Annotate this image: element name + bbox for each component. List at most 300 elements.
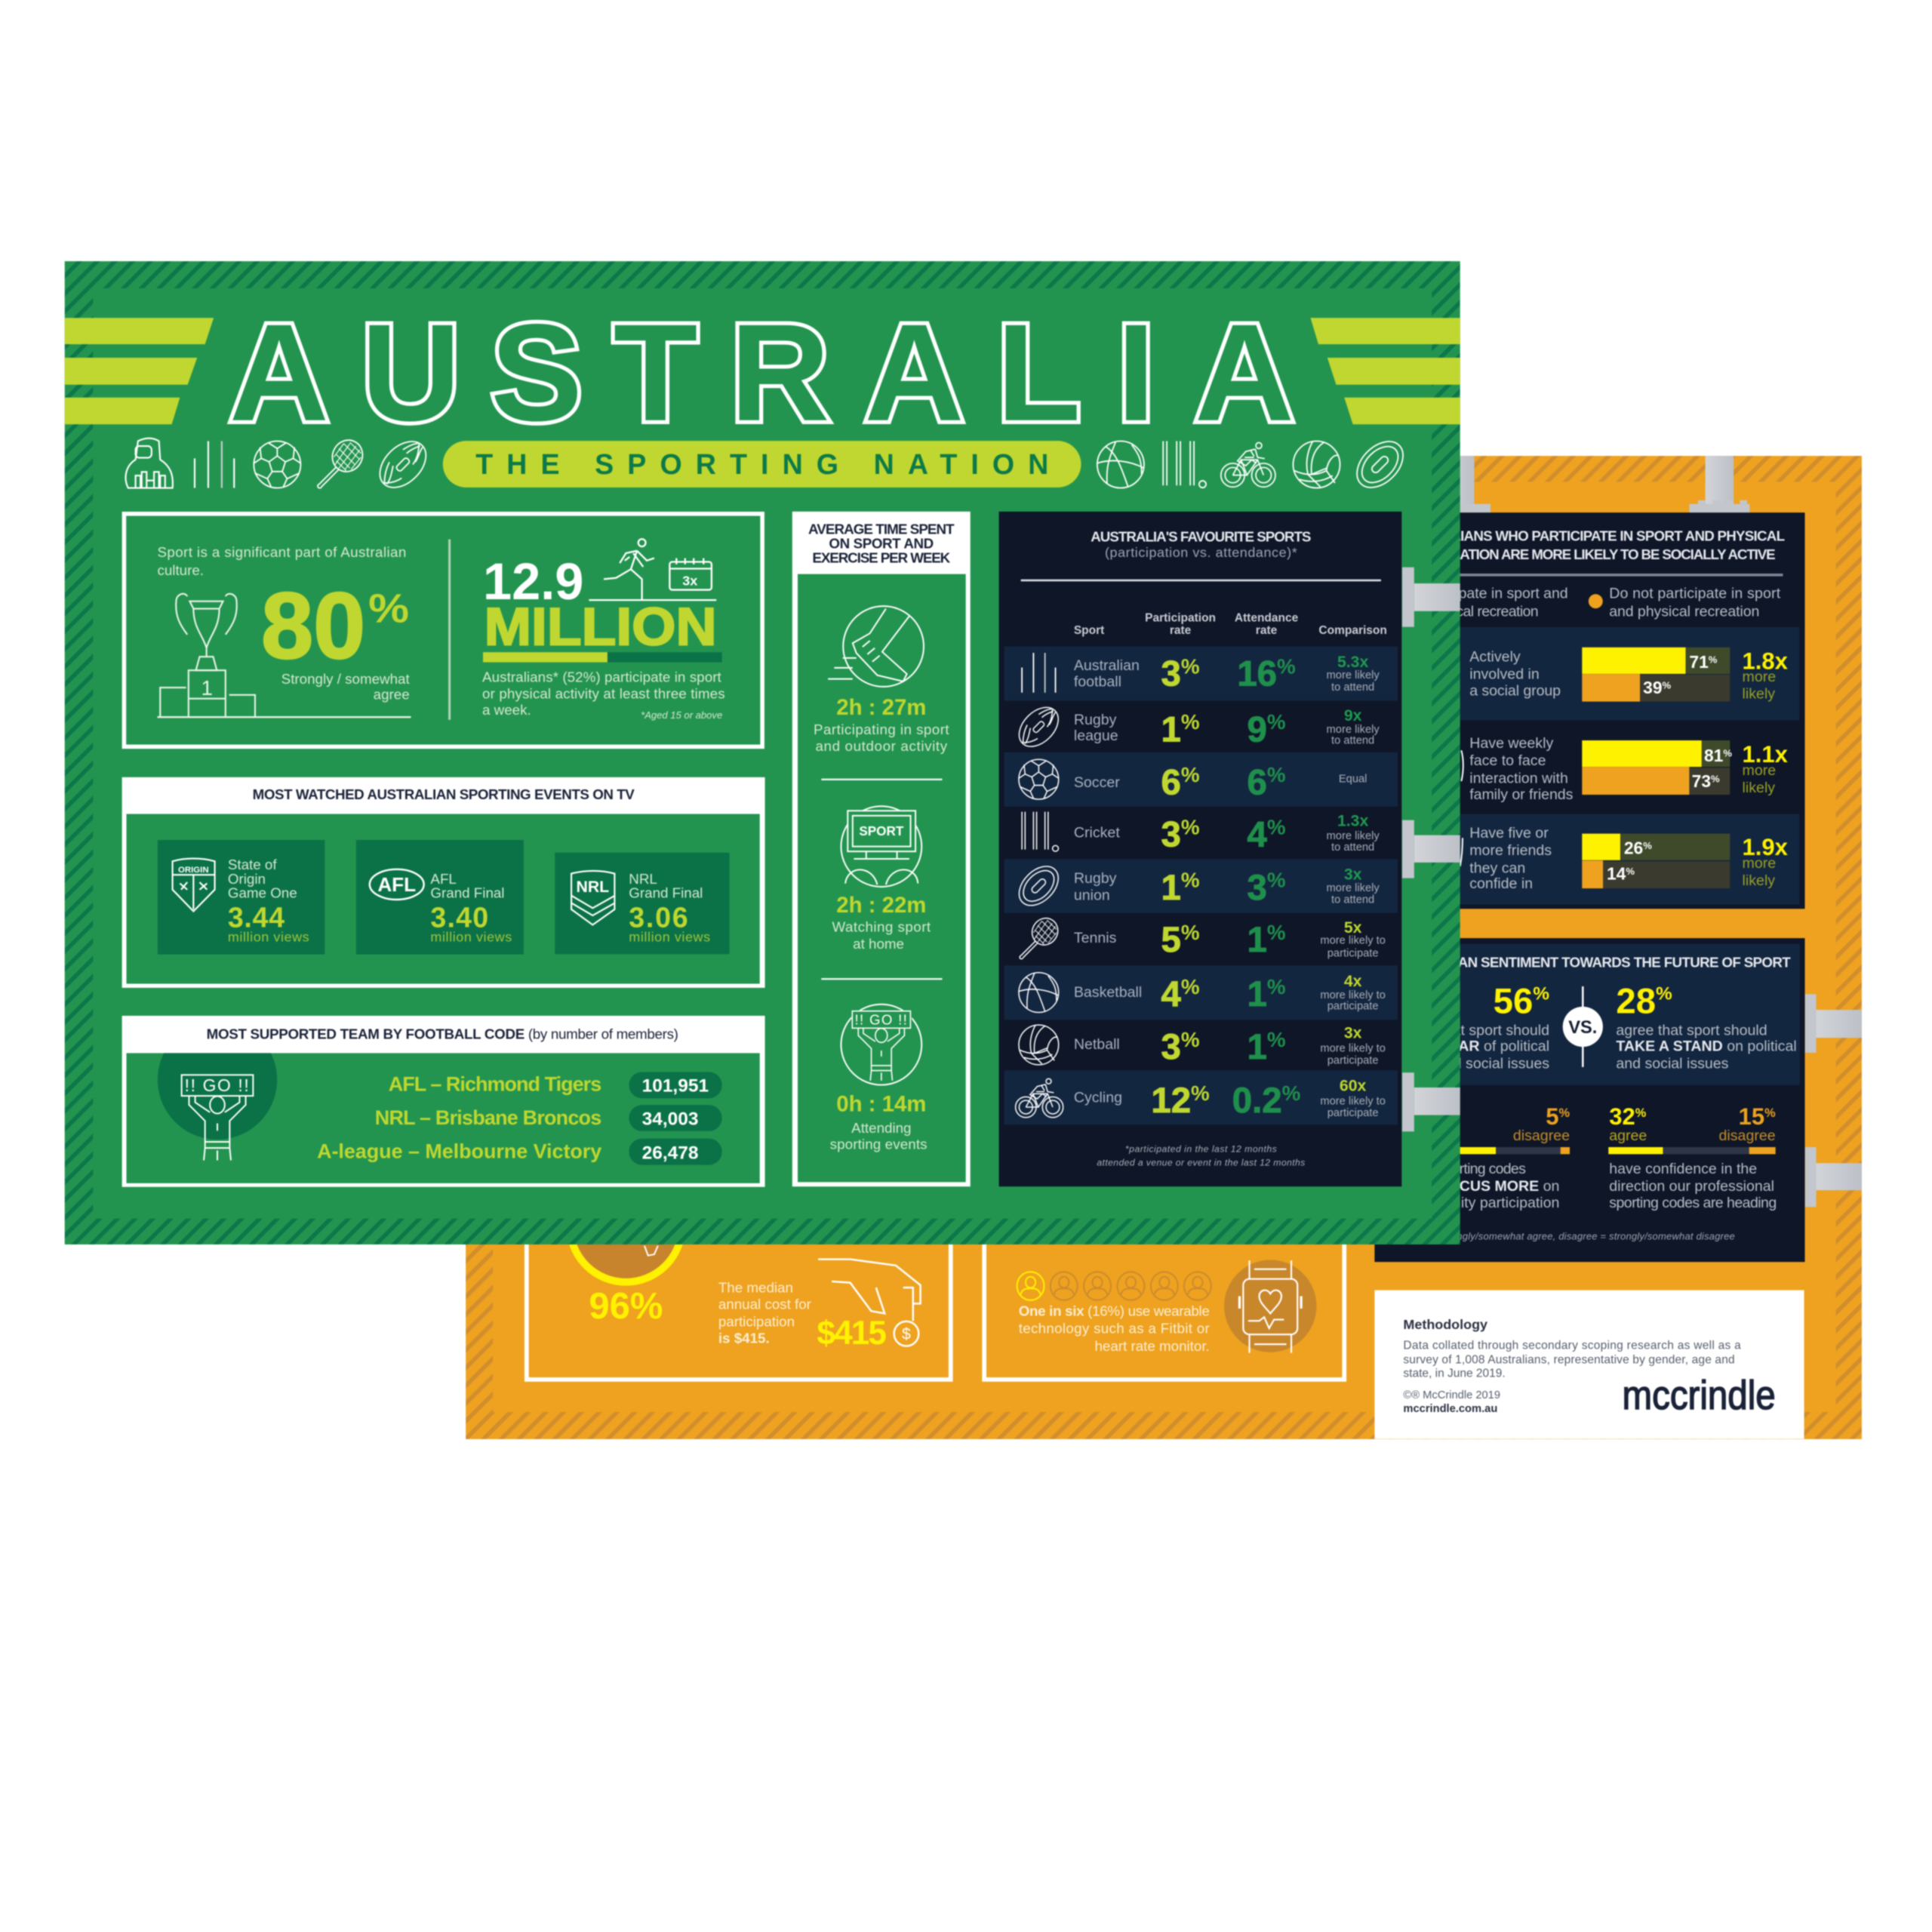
row: Cricket: 1.3x	[1337, 813, 1368, 830]
panel: favourite sports table	[999, 512, 1401, 1186]
table header: Participation	[1145, 612, 1216, 625]
item: attending: Attending	[851, 1120, 911, 1136]
stat: focus more: Sporting codes	[1435, 1161, 1526, 1177]
stat: 56 percent steer clear: agree that sport should	[1398, 1022, 1549, 1038]
member counts	[629, 1072, 722, 1165]
row: Rugby league: 9x	[1344, 707, 1362, 724]
icon: hand dropping coin: $	[902, 1326, 911, 1343]
panel: sentiment towards future of sport	[1374, 938, 1805, 1262]
title: AUSTRALIA: A	[1195, 295, 1294, 450]
row: Cricket: %	[1181, 815, 1200, 838]
panel: most supported team	[122, 1016, 765, 1187]
icon: TV on circle: SPORT	[859, 823, 904, 838]
row: Tennis: 1	[1247, 920, 1267, 960]
stat: confidence in direction: disagree	[1719, 1128, 1776, 1144]
stat: 56 percent steer clear: STEER CLEAR of political	[1375, 1038, 1549, 1055]
row: Basketball: more likely to	[1320, 989, 1386, 1001]
bars: socially active group: more	[1743, 669, 1776, 685]
text: wearables: heart rate monitor.	[1094, 1338, 1210, 1354]
card: AFL Grand Final: 3.40	[430, 902, 488, 934]
row: Basketball: %	[1267, 975, 1286, 998]
row: Basketball: %	[1181, 975, 1200, 998]
heading: favourite sports: (participation vs. attendance)*	[1105, 545, 1297, 560]
row: Cycling: participate	[1327, 1107, 1379, 1119]
stat: 28 percent take a stand: %	[1656, 984, 1672, 1004]
panel: methodology: survey of 1,008 Australians, representative by gender, age and	[1403, 1354, 1735, 1367]
panel: average time	[792, 512, 971, 1186]
panel: orange background sheet	[466, 456, 1862, 1439]
panel: wearable technology	[984, 1220, 1344, 1380]
icon: basketball	[1097, 441, 1144, 488]
heading: average time: EXERCISE PER WEEK	[812, 549, 951, 565]
panel: methodology	[1374, 1291, 1804, 1439]
icon: runner and calendar: 3x	[682, 574, 697, 589]
bars: socially active group: %	[1709, 654, 1718, 665]
row: Cycling	[1004, 1070, 1398, 1124]
bars: socially active group: 39	[1643, 678, 1663, 697]
icon: netball	[1293, 441, 1340, 488]
panel: most watched events	[122, 777, 765, 988]
legend	[1418, 586, 1781, 620]
row: Tennis: 5	[1161, 920, 1181, 960]
row: Netball: %	[1267, 1028, 1286, 1051]
legend: Participate in sport and	[1418, 586, 1568, 602]
row: Rugby league: %	[1267, 710, 1286, 734]
donut: 96 percent: 96%	[589, 1286, 663, 1327]
icon: rugby ball	[371, 432, 435, 497]
team rows: AFL – Richmond Tigers	[389, 1073, 601, 1096]
heading: most supported: MOST SUPPORTED TEAM BY FOOTBALL CODE (by number of members)	[207, 1026, 678, 1041]
row: Rugby league: %	[1181, 710, 1200, 734]
panel: green main sheet	[65, 261, 1460, 1244]
bars: weekly interaction: 1.1x	[1743, 741, 1789, 768]
text: strongly agree: agree	[374, 687, 410, 703]
text: participation: Australians* (52%) participate in sport	[482, 669, 722, 685]
bars: five or more friends: 26	[1624, 838, 1643, 857]
footnote: table	[1097, 1144, 1305, 1168]
title: AUSTRALIA: R	[730, 295, 829, 450]
row: Rugby league: 9	[1247, 710, 1267, 750]
bars: five or more friends: they can	[1469, 860, 1525, 877]
decorative lime stripes right	[1310, 318, 1460, 424]
row: Tennis: 5x	[1344, 919, 1362, 937]
stat: focus more: %	[1558, 1106, 1570, 1120]
member counts: 101,951	[642, 1076, 709, 1097]
card: NRL Grand Final: NRL	[629, 871, 657, 887]
bars: socially active group: 1.8x	[1743, 648, 1789, 675]
bars: five or more friends: likely	[1743, 872, 1775, 889]
bars: weekly interaction: Have weekly	[1469, 735, 1553, 752]
item: attending	[830, 1004, 928, 1152]
row: Basketball: 1	[1247, 974, 1267, 1014]
icon: hand dropping coin	[818, 1260, 921, 1346]
card: State of Origin	[158, 840, 325, 955]
panel: methodology: Data collated through secondary scoping research as well as a	[1403, 1340, 1741, 1352]
title: AUSTRALIA: L	[996, 295, 1081, 450]
icon: NRL shield	[571, 871, 614, 924]
icon: fan with go banner	[158, 1053, 277, 1160]
stat: focus more: 5	[1546, 1103, 1558, 1130]
icon: runner and calendar	[589, 539, 716, 600]
text: wearables: technology such as a Fitbit or	[1019, 1321, 1210, 1337]
row: Cricket: Cricket	[1074, 824, 1120, 841]
text: wearables: One in six (16%) use wearable	[1019, 1303, 1210, 1319]
row: Cricket: more likely	[1327, 830, 1380, 842]
stat: confidence in direction: have confidence in the	[1609, 1161, 1757, 1177]
row: Cycling: more likely to	[1320, 1096, 1386, 1108]
row: Rugby union: union	[1074, 888, 1110, 904]
row: Rugby union: to attend	[1331, 894, 1374, 906]
heading: average time: ON SPORT AND	[829, 536, 934, 552]
icon row left	[126, 432, 435, 497]
item: attending: 0h : 14m	[836, 1092, 926, 1117]
text: participation	[482, 669, 725, 721]
bars: weekly interaction: family or friends	[1469, 786, 1574, 803]
bars: weekly interaction: %	[1711, 774, 1720, 785]
heading: most watched: MOST WATCHED AUSTRALIAN SPORTING EVENTS ON TV	[253, 786, 635, 802]
item: participating: 2h : 27m	[836, 695, 926, 720]
title: AUSTRALIA: A	[229, 295, 329, 450]
footnote: table: *participated in the last 12 months	[1125, 1144, 1277, 1155]
stat: confidence in direction: %	[1764, 1106, 1776, 1120]
bars: weekly interaction: 73	[1692, 771, 1711, 791]
icon: trophy on podium: 1	[202, 676, 213, 700]
row: Rugby league: 1	[1161, 710, 1181, 750]
icon: soccer ball	[254, 441, 300, 488]
item: watching: 2h : 22m	[836, 893, 926, 918]
row: Cycling: 60x	[1340, 1077, 1367, 1094]
stat: 12.9 million	[483, 552, 722, 663]
row: Soccer: 6	[1247, 763, 1267, 803]
heading: sentiment: AUSTRALIAN SENTIMENT TOWARDS THE FUTURE OF SPORT	[1390, 955, 1791, 971]
icon: goal posts	[195, 441, 234, 488]
row: Soccer	[1004, 752, 1398, 807]
row: Tennis: more likely to	[1320, 935, 1386, 947]
member counts: 26,478	[642, 1143, 698, 1164]
item: watching	[832, 806, 931, 952]
table header: Attendance	[1235, 612, 1299, 625]
logo: mccrindle: mccrindle	[1623, 1373, 1776, 1418]
row: Tennis: %	[1267, 921, 1286, 944]
row: Rugby union: 3x	[1344, 866, 1362, 884]
text: strongly agree	[281, 671, 410, 703]
bars: five or more friends: 14	[1607, 864, 1626, 884]
row: Rugby league: Rugby	[1074, 712, 1117, 728]
stat: confidence in direction: direction our professional	[1609, 1178, 1774, 1195]
stat: 56 percent steer clear: 56	[1494, 982, 1533, 1022]
item: watching: at home	[853, 936, 904, 952]
text: median cost: annual cost for	[718, 1297, 811, 1312]
icon: AFL logo	[370, 869, 424, 900]
row: Basketball: 4x	[1344, 973, 1362, 990]
panel: methodology: mccrindle.com.au	[1403, 1403, 1497, 1415]
subtitle pill	[443, 441, 1081, 488]
bars: weekly interaction	[1469, 735, 1789, 803]
bars: weekly interaction: %	[1723, 747, 1732, 758]
item: attending: sporting events	[830, 1136, 928, 1152]
stat: 12.9 million: MILLION	[485, 596, 717, 656]
title: AUSTRALIA: U	[361, 295, 461, 450]
table header	[1074, 612, 1387, 637]
bars: weekly interaction: face to face	[1469, 752, 1546, 769]
row: Rugby union: 3	[1247, 868, 1267, 908]
text: participation: *Aged 15 or above	[641, 709, 722, 721]
bars: socially active group: involved in	[1469, 666, 1540, 683]
row: Cycling: %	[1191, 1081, 1210, 1105]
item: participating: Participating in sport	[814, 721, 949, 737]
row: Soccer: %	[1267, 763, 1286, 786]
item: participating: and outdoor activity	[815, 738, 948, 754]
icons: one in six people	[1017, 1272, 1211, 1300]
row: Tennis: Tennis	[1074, 930, 1117, 946]
team rows: NRL – Brisbane Broncos	[375, 1106, 601, 1129]
team rows	[317, 1073, 601, 1163]
row: Netball: participate	[1327, 1054, 1379, 1066]
row: Cricket: 3	[1161, 815, 1181, 855]
row: Rugby union: Rugby	[1074, 870, 1117, 887]
row: Australian football: %	[1277, 654, 1296, 678]
text: participation: or physical activity at least three times	[482, 686, 725, 702]
title: AUSTRALIA: A	[864, 295, 964, 450]
card: NRL Grand Final: million views	[629, 930, 710, 945]
row: Rugby league	[1012, 700, 1380, 754]
row: Cycling: Cycling	[1074, 1089, 1122, 1106]
stat: focus more	[1380, 1103, 1570, 1211]
stat: 28 percent take a stand: agree that sport should	[1616, 1022, 1767, 1038]
bars: weekly interaction: 81	[1704, 746, 1723, 765]
row: Rugby union: %	[1267, 869, 1286, 892]
row: Netball: Netball	[1074, 1036, 1120, 1053]
icon row right	[1097, 432, 1412, 497]
row: Soccer: %	[1181, 763, 1200, 786]
row: Cricket: %	[1267, 815, 1286, 838]
bars: socially active group: 71	[1689, 652, 1709, 672]
row: Netball: 3	[1161, 1027, 1181, 1067]
bars: socially active group: a social group	[1469, 683, 1561, 700]
bars: five or more friends: more	[1743, 855, 1776, 872]
text: median cost: The median	[718, 1280, 793, 1296]
row: Rugby union: 1	[1161, 868, 1181, 908]
footnote: *agree = strongly/somewhat agree, disagree = strongly/somewhat disagree	[1398, 1230, 1735, 1241]
table header: rate	[1170, 624, 1192, 637]
heading: favourite sports: AUSTRALIA'S FAVOURITE SPORTS	[1091, 529, 1311, 545]
row: Basketball: participate	[1327, 1001, 1379, 1013]
card: AFL Grand Final: Grand Final	[430, 885, 504, 901]
stat: confidence in direction: agree	[1609, 1128, 1647, 1144]
icon: cyclist	[1221, 443, 1275, 487]
row: Cricket: 4	[1247, 815, 1267, 855]
row: Netball: %	[1181, 1028, 1200, 1051]
row: Rugby league: to attend	[1331, 735, 1374, 747]
text: median cost: is $415.	[718, 1331, 770, 1346]
row: Rugby union: %	[1181, 869, 1200, 892]
legend: and physical recreation	[1609, 603, 1759, 620]
card: AFL Grand Final: AFL	[430, 871, 457, 887]
card: AFL Grand Final	[356, 840, 524, 955]
bars: socially active group: Actively	[1469, 649, 1521, 666]
versus badge	[1563, 986, 1603, 1067]
row: Cricket: to attend	[1331, 841, 1374, 854]
table header: rate	[1256, 624, 1278, 637]
row: Cycling: %	[1282, 1081, 1300, 1105]
bars: socially active group: %	[1663, 680, 1672, 691]
bars: five or more friends: more friends	[1469, 842, 1552, 859]
row: Australian football: to attend	[1331, 681, 1374, 694]
icon: smart watch	[1224, 1260, 1316, 1353]
row: Australian football: 16	[1237, 654, 1277, 694]
card: State of Origin: 3.44	[228, 902, 285, 934]
decorative lime stripes left	[65, 318, 214, 424]
legend: Do not participate in sport	[1609, 586, 1781, 602]
panel: methodology: state, in June 2019.	[1403, 1367, 1506, 1380]
row: Soccer: 6	[1161, 763, 1181, 803]
text: wearables	[1019, 1303, 1210, 1354]
icon: origin shield	[173, 859, 215, 912]
row: Basketball: 4	[1161, 974, 1181, 1014]
item: participating	[814, 606, 949, 754]
icons: peeking edge of hidden icons	[1460, 750, 1463, 866]
footnote: table: attended a venue or event in the last 12 months	[1097, 1157, 1305, 1168]
stat: 80 percent: 80	[261, 574, 365, 678]
subtitle pill: THE SPORTING NATION	[475, 448, 1048, 480]
icon: trophy on podium	[157, 594, 411, 717]
stat: 56 percent steer clear: %	[1533, 984, 1549, 1004]
row: Australian football: Australian	[1074, 657, 1140, 674]
row: Soccer: Equal	[1339, 774, 1367, 786]
bars: five or more friends: confide in	[1469, 875, 1533, 892]
row: Tennis: participate	[1327, 947, 1379, 959]
heading: average time	[808, 521, 955, 565]
stat: confidence in direction: 15	[1739, 1103, 1764, 1130]
title: AUSTRALIA: T	[614, 295, 697, 450]
bars: socially active group: likely	[1743, 686, 1775, 703]
row: Australian football: 3	[1161, 654, 1181, 694]
row: Netball: more likely to	[1320, 1042, 1386, 1054]
icon: NRL shield: NRL	[577, 878, 609, 896]
text: sport significance	[157, 544, 406, 578]
row: Australian football: %	[1181, 654, 1200, 678]
bars: five or more friends: 1.9x	[1743, 834, 1789, 860]
donut: 96 percent	[570, 1170, 682, 1327]
stat: 28 percent take a stand: TAKE A STAND on political	[1616, 1038, 1797, 1055]
title: AUSTRALIA	[229, 295, 1294, 450]
stat: focus more: should FOCUS MORE on	[1391, 1178, 1559, 1195]
row: Rugby league: more likely	[1327, 724, 1380, 736]
stat: 28 percent take a stand: and social issues	[1616, 1056, 1729, 1072]
text: strongly agree: Strongly / somewhat	[281, 671, 410, 687]
icon: cricket wickets	[1163, 441, 1206, 488]
stat: confidence in direction: %	[1635, 1106, 1647, 1120]
versus badge: VS.	[1568, 1018, 1597, 1038]
row: Australian football	[1004, 646, 1398, 700]
icon: TV on circle	[841, 806, 921, 887]
bars: five or more friends: %	[1626, 866, 1635, 877]
grey column brackets	[1417, 456, 1862, 1207]
stat: 80 percent: %	[368, 586, 409, 631]
bars: five or more friends: %	[1643, 840, 1652, 851]
icon: rugby union ball	[1348, 432, 1412, 497]
bars: five or more friends: Have five or	[1469, 825, 1549, 841]
icon: kettlebell	[126, 438, 173, 488]
heading: social panel	[1397, 528, 1785, 562]
bars: weekly interaction: likely	[1743, 780, 1775, 796]
stat: confidence in direction: 32	[1609, 1103, 1635, 1130]
row: Australian football: 5.3x	[1337, 654, 1368, 671]
panel: cost of participation	[527, 1170, 951, 1380]
icon: fan with banner	[841, 1004, 921, 1085]
icon: tennis racquet	[318, 435, 368, 488]
text: sport significance: Sport is a significant part of Australian	[157, 544, 406, 560]
row: Rugby union: more likely	[1327, 882, 1380, 894]
stat: 56 percent steer clear: and social issues	[1437, 1056, 1549, 1072]
card: State of Origin: State of	[228, 857, 277, 872]
row: Australian football: more likely	[1327, 669, 1380, 681]
table header: Comparison	[1318, 624, 1387, 637]
stat: focus more: disagree	[1513, 1128, 1570, 1144]
stat: 12.9 million: 12.9	[483, 552, 583, 611]
bars: five or more friends	[1469, 825, 1789, 892]
row: Cycling: 12	[1151, 1081, 1191, 1121]
stat: focus more: community participation	[1404, 1195, 1559, 1211]
row: Netball	[1019, 1025, 1386, 1067]
text: sport significance: culture.	[157, 562, 204, 578]
row: Basketball	[1004, 965, 1398, 1020]
title: AUSTRALIA: I	[1117, 295, 1155, 450]
row: Tennis	[1020, 913, 1386, 960]
heading: average time: AVERAGE TIME SPENT	[808, 521, 955, 537]
card: NRL Grand Final	[555, 853, 730, 954]
member counts: 34,003	[642, 1109, 698, 1130]
stat: 56 percent steer clear	[1375, 982, 1549, 1072]
row: Basketball: Basketball	[1074, 984, 1142, 1001]
stat: confidence in direction	[1608, 1103, 1777, 1211]
card: State of Origin: million views	[228, 930, 309, 945]
card: AFL Grand Final: million views	[430, 930, 512, 945]
card: NRL Grand Final: Grand Final	[629, 885, 703, 901]
stat: $415: $415	[817, 1315, 887, 1352]
table header: Sport	[1074, 624, 1104, 637]
row: Rugby union	[1004, 859, 1398, 913]
icon: origin shield: ORIGIN	[178, 866, 209, 875]
panel: methodology: Methodology	[1403, 1317, 1487, 1332]
row: Netball: 3x	[1344, 1025, 1362, 1042]
row: Tennis: %	[1181, 921, 1200, 944]
stat: 28 percent take a stand: 28	[1616, 982, 1656, 1022]
stat: confidence in direction: sporting codes are heading	[1609, 1195, 1777, 1211]
legend: physical recreation	[1424, 603, 1539, 620]
item: watching: Watching sport	[832, 918, 931, 934]
panel: 80 percent and 12.9 million	[124, 514, 762, 746]
icon: AFL logo: AFL	[377, 873, 416, 896]
heading: social panel: RECREATION ARE MORE LIKELY TO BE SOCIALLY ACTIVE	[1414, 546, 1776, 562]
row: Rugby league: league	[1074, 728, 1118, 744]
bars: weekly interaction: more	[1743, 762, 1776, 779]
text: participation: a week.	[482, 702, 531, 718]
row: Cricket	[1022, 812, 1380, 855]
title: AUSTRALIA: S	[491, 295, 583, 450]
card: State of Origin: Game One	[228, 885, 297, 901]
row: Soccer: Soccer	[1074, 774, 1120, 791]
text: median cost	[718, 1280, 811, 1346]
grey side brackets	[1402, 568, 1460, 1131]
panel: social activity comparison	[1355, 512, 1805, 909]
stat: 28 percent take a stand	[1616, 982, 1797, 1072]
row: Australian football: football	[1074, 673, 1121, 690]
heading: favourite sports	[1091, 529, 1311, 560]
bars: weekly interaction: interaction with	[1469, 771, 1568, 787]
heading: social panel: AUSTRALIANS WHO PARTICIPATE IN SPORT AND PHYSICAL	[1397, 528, 1785, 544]
text: median cost: participation	[718, 1314, 795, 1330]
